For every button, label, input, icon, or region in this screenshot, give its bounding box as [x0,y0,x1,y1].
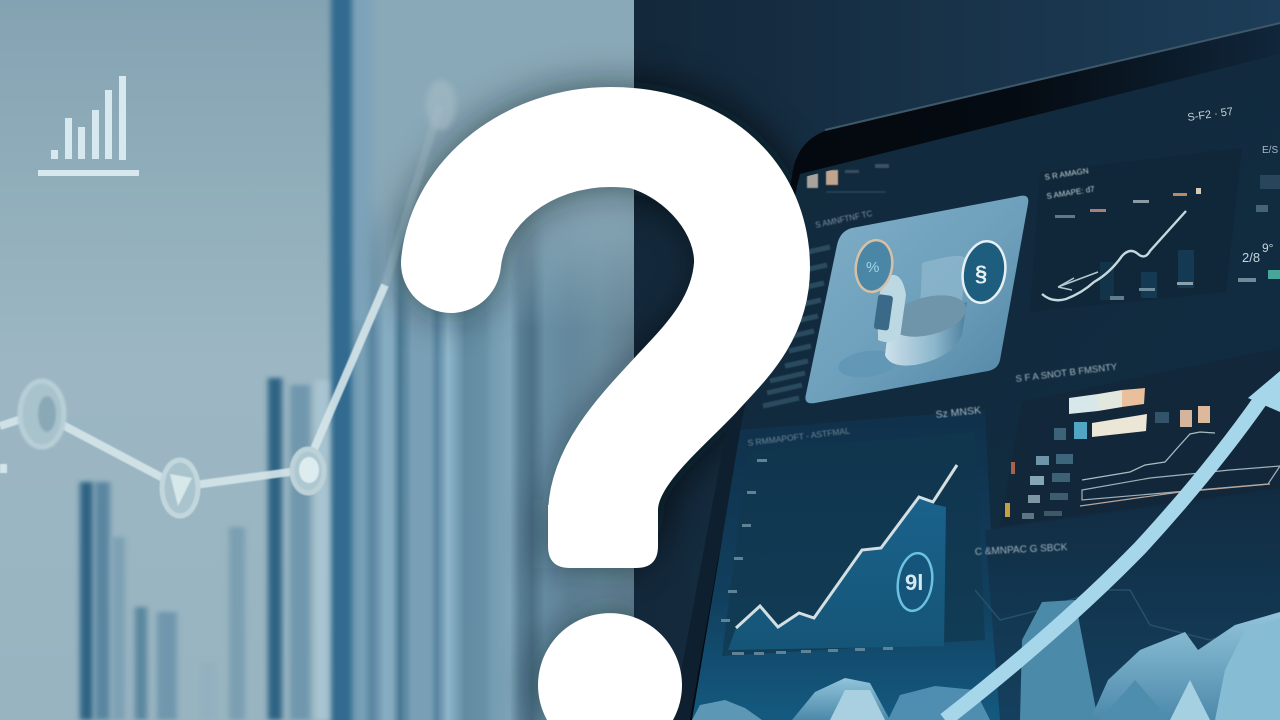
header value text: S-F2 · 57 [1187,106,1234,124]
middle node [162,460,198,516]
card: 3D product illustration: % [866,259,879,276]
table rows [1005,454,1073,519]
panel: top line chart [1041,167,1201,302]
panel: right metrics [1238,145,1280,282]
icon: small bar chart [38,76,139,176]
filled area [728,497,946,650]
chart bars [1100,262,1114,300]
trend line [1042,211,1186,300]
phone on stand [878,275,906,342]
chips [1054,388,1210,440]
back tile [920,256,965,301]
table line chart [1080,432,1280,506]
dark line chart behind mountains [975,590,1280,640]
chart labels: S R AMAGN [1044,166,1089,182]
arrow: rising growth arrow [945,371,1280,720]
question mark shadow on dark side [634,66,798,574]
panel: blurred left background [0,0,634,720]
icon: large white question mark: ? [582,605,643,717]
mountains lower right [1020,600,1280,720]
mid-lower title: C &MNPAC G SBCK [975,542,1068,558]
header tabs [807,164,889,193]
icon: left badge [854,238,894,294]
panel: main line chart: S RMMAPOFT - ASTFMAL [747,425,851,448]
panel: dark laptop background [634,0,1280,720]
lower right region [985,530,1280,720]
mountains lower left [692,678,990,720]
icon: ring badge [894,551,936,613]
left node [20,381,64,447]
icon: large white question mark [451,137,760,720]
section titles: Sz MNSK [935,404,982,421]
lower left blue region [690,410,1000,720]
section title: S F A SNOT B FMSNTY [1015,362,1118,385]
base disc [838,350,890,378]
panel: main line chart [721,404,985,656]
laptop screen [692,54,1280,720]
right node [292,449,324,493]
blurred bar chart [80,0,634,720]
chart labels [1044,166,1096,201]
panel: right metrics: 2/8 [1242,250,1260,265]
question mark drop shadow [451,137,760,720]
sidebar label: S AMNFTNF TC [815,209,873,230]
cylinder [885,302,967,366]
panel: right metrics: E/S [1262,145,1278,156]
laptop bezel [690,24,1280,720]
sidebar list [763,247,830,406]
panel: main line chart: 9l [905,570,923,595]
panel: middle table with chips [1005,362,1280,519]
blurred trend line with nodes [0,80,456,516]
card: 3D product illustration: § [975,261,987,286]
card: 3D product illustration [805,196,1028,403]
chart labels: S AMAPE: d7 [1046,184,1096,201]
axis ticks [721,459,893,655]
panel: right metrics: 9° [1262,241,1274,255]
laptop top edge highlight [825,23,1280,130]
icon: right badge [961,240,1007,304]
growth line [736,465,957,628]
laptop outer shell [673,450,736,720]
